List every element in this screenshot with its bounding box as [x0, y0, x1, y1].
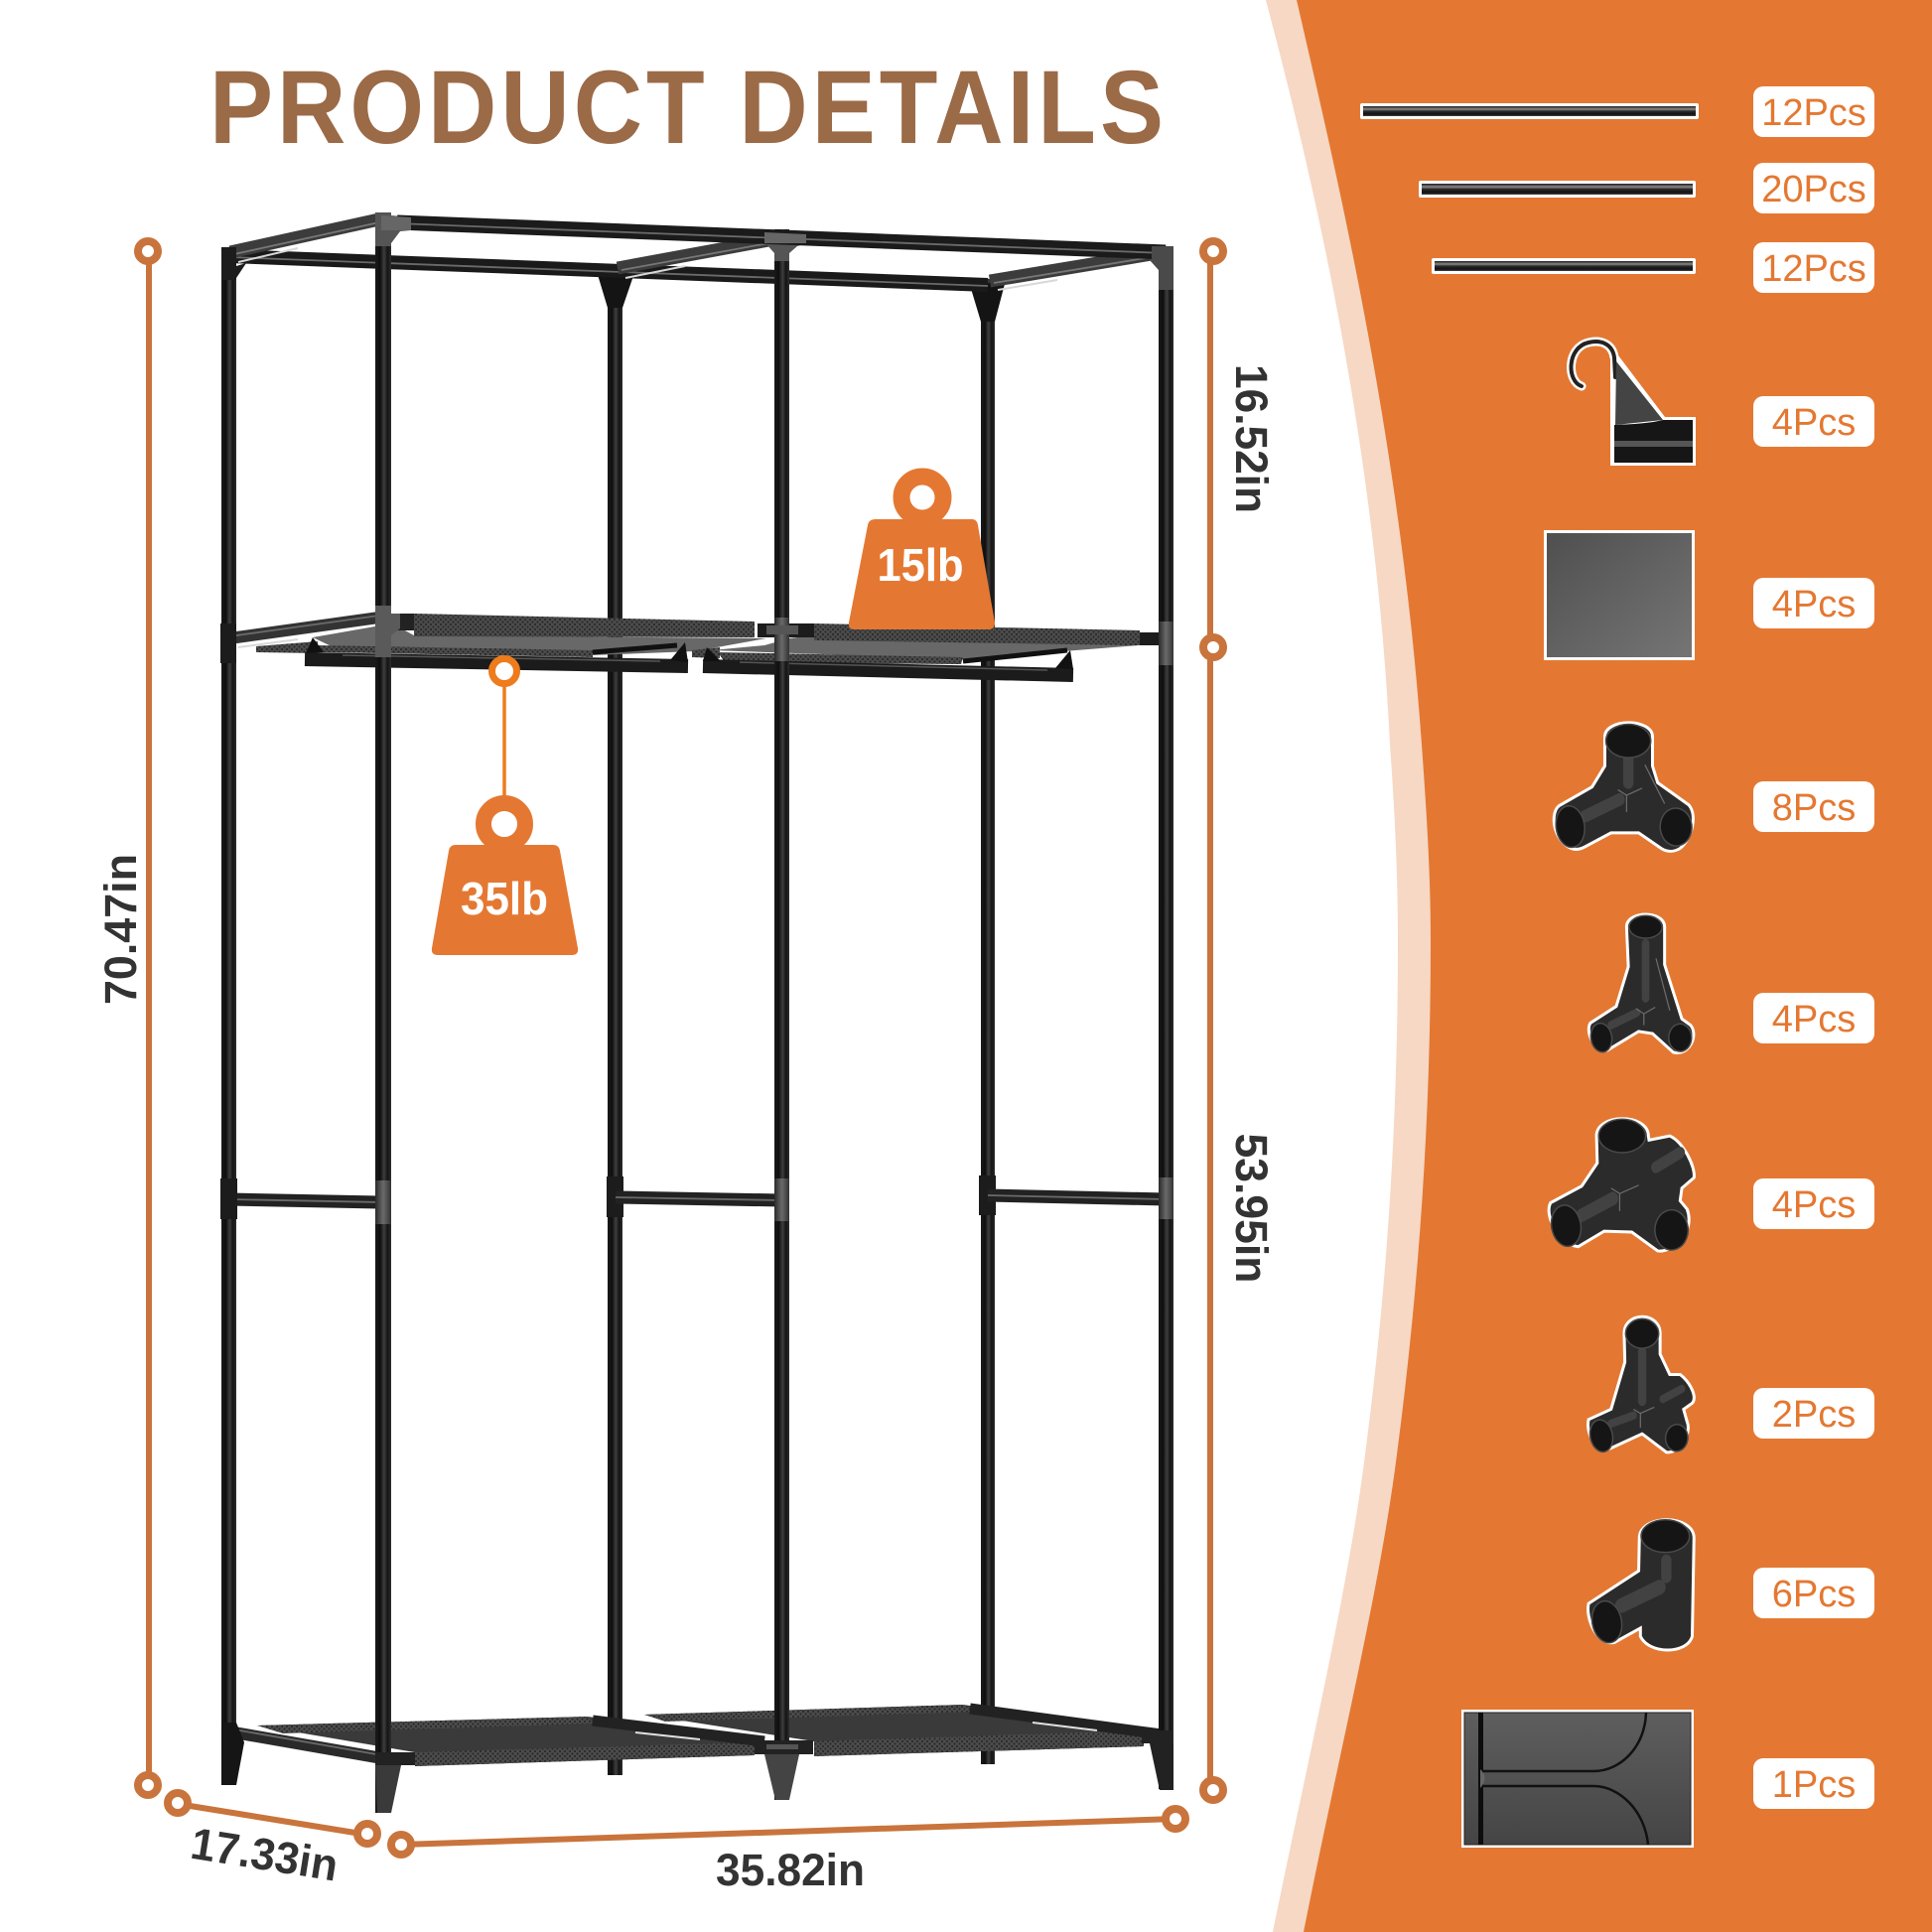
weight: 15lb shelf capacity: 15lb	[878, 539, 963, 591]
title: PRODUCT DETAILS	[209, 50, 1164, 166]
quantity: 20Pcs: 20Pcs	[1761, 169, 1866, 210]
quantity: 8Pcs: 8Pcs	[1772, 787, 1856, 829]
weight: 35lb rod capacity	[432, 659, 578, 955]
quantity: 4Pcs: 4Pcs	[1772, 1184, 1856, 1226]
dimension: width 35.82in	[391, 1809, 1185, 1895]
back posts	[596, 265, 1005, 1775]
quantity: 12Pcs: 12Pcs	[1761, 92, 1866, 134]
part: three-way connector	[1552, 723, 1697, 852]
part: elbow tee connector	[1587, 1520, 1694, 1650]
quantity: 6Pcs: 6Pcs	[1772, 1574, 1856, 1615]
quantity: 4Pcs: 4Pcs	[1772, 584, 1856, 625]
panel: parts background	[1266, 0, 1932, 1932]
dimension: width 35.82in: 35.82in	[716, 1845, 865, 1895]
dimension: upper and lower heights: 53.95in	[1226, 1134, 1277, 1283]
post connectors	[220, 212, 1173, 1224]
quantity: 12Pcs: 12Pcs	[1761, 248, 1866, 290]
dimension: upper and lower heights: 16.52in	[1226, 364, 1277, 513]
feet	[221, 1723, 1173, 1813]
weight: 35lb rod capacity: 35lb	[461, 873, 548, 924]
part: medium rod	[1419, 181, 1696, 198]
part: short rod	[1432, 258, 1696, 274]
top back rail	[229, 256, 988, 286]
quantity: 4Pcs	[1753, 993, 1874, 1043]
part: four-way connector	[1547, 1119, 1694, 1257]
dimension: upper and lower heights	[1203, 241, 1277, 1800]
weight: 15lb shelf capacity	[849, 477, 995, 629]
bottom shelf	[228, 1705, 1162, 1766]
part: non-woven cover	[1461, 1710, 1694, 1848]
quantity: 4Pcs: 4Pcs	[1772, 999, 1856, 1040]
quantity: 1Pcs: 1Pcs	[1772, 1764, 1856, 1806]
middle shelf right	[712, 623, 1140, 664]
lower side rails	[229, 1195, 1166, 1202]
quantity: 8Pcs	[1753, 781, 1874, 832]
dimension: depth 17.33in: 17.33in	[188, 1818, 342, 1891]
part: tall three-way connector	[1587, 914, 1696, 1056]
top front rail	[381, 215, 1173, 260]
quantity: 6Pcs	[1753, 1568, 1874, 1618]
dimension: height 70.47in	[95, 241, 158, 1795]
part: mesh panel	[1544, 530, 1695, 660]
hanging rods	[305, 637, 1073, 675]
front and side posts	[221, 212, 1173, 1813]
quantity: 1Pcs	[1753, 1758, 1874, 1809]
dimension: height 70.47in: 70.47in	[95, 854, 146, 1005]
quantity: 2Pcs: 2Pcs	[1772, 1394, 1856, 1436]
top side rails	[230, 219, 1164, 290]
quantity: 4Pcs	[1753, 578, 1874, 628]
wardrobe frame	[220, 212, 1173, 1813]
quantity: 4Pcs	[1753, 396, 1874, 447]
part: five-way connector	[1587, 1316, 1694, 1455]
middle shelf left	[256, 614, 766, 658]
quantity: 2Pcs	[1753, 1388, 1874, 1439]
part: long rod	[1360, 103, 1699, 119]
quantity: 4Pcs	[1753, 1178, 1874, 1229]
dimension: depth 17.33in	[168, 1793, 377, 1891]
middle side rails	[229, 614, 1166, 647]
part: hanger hook	[1572, 342, 1696, 466]
quantity: 4Pcs: 4Pcs	[1772, 402, 1856, 444]
